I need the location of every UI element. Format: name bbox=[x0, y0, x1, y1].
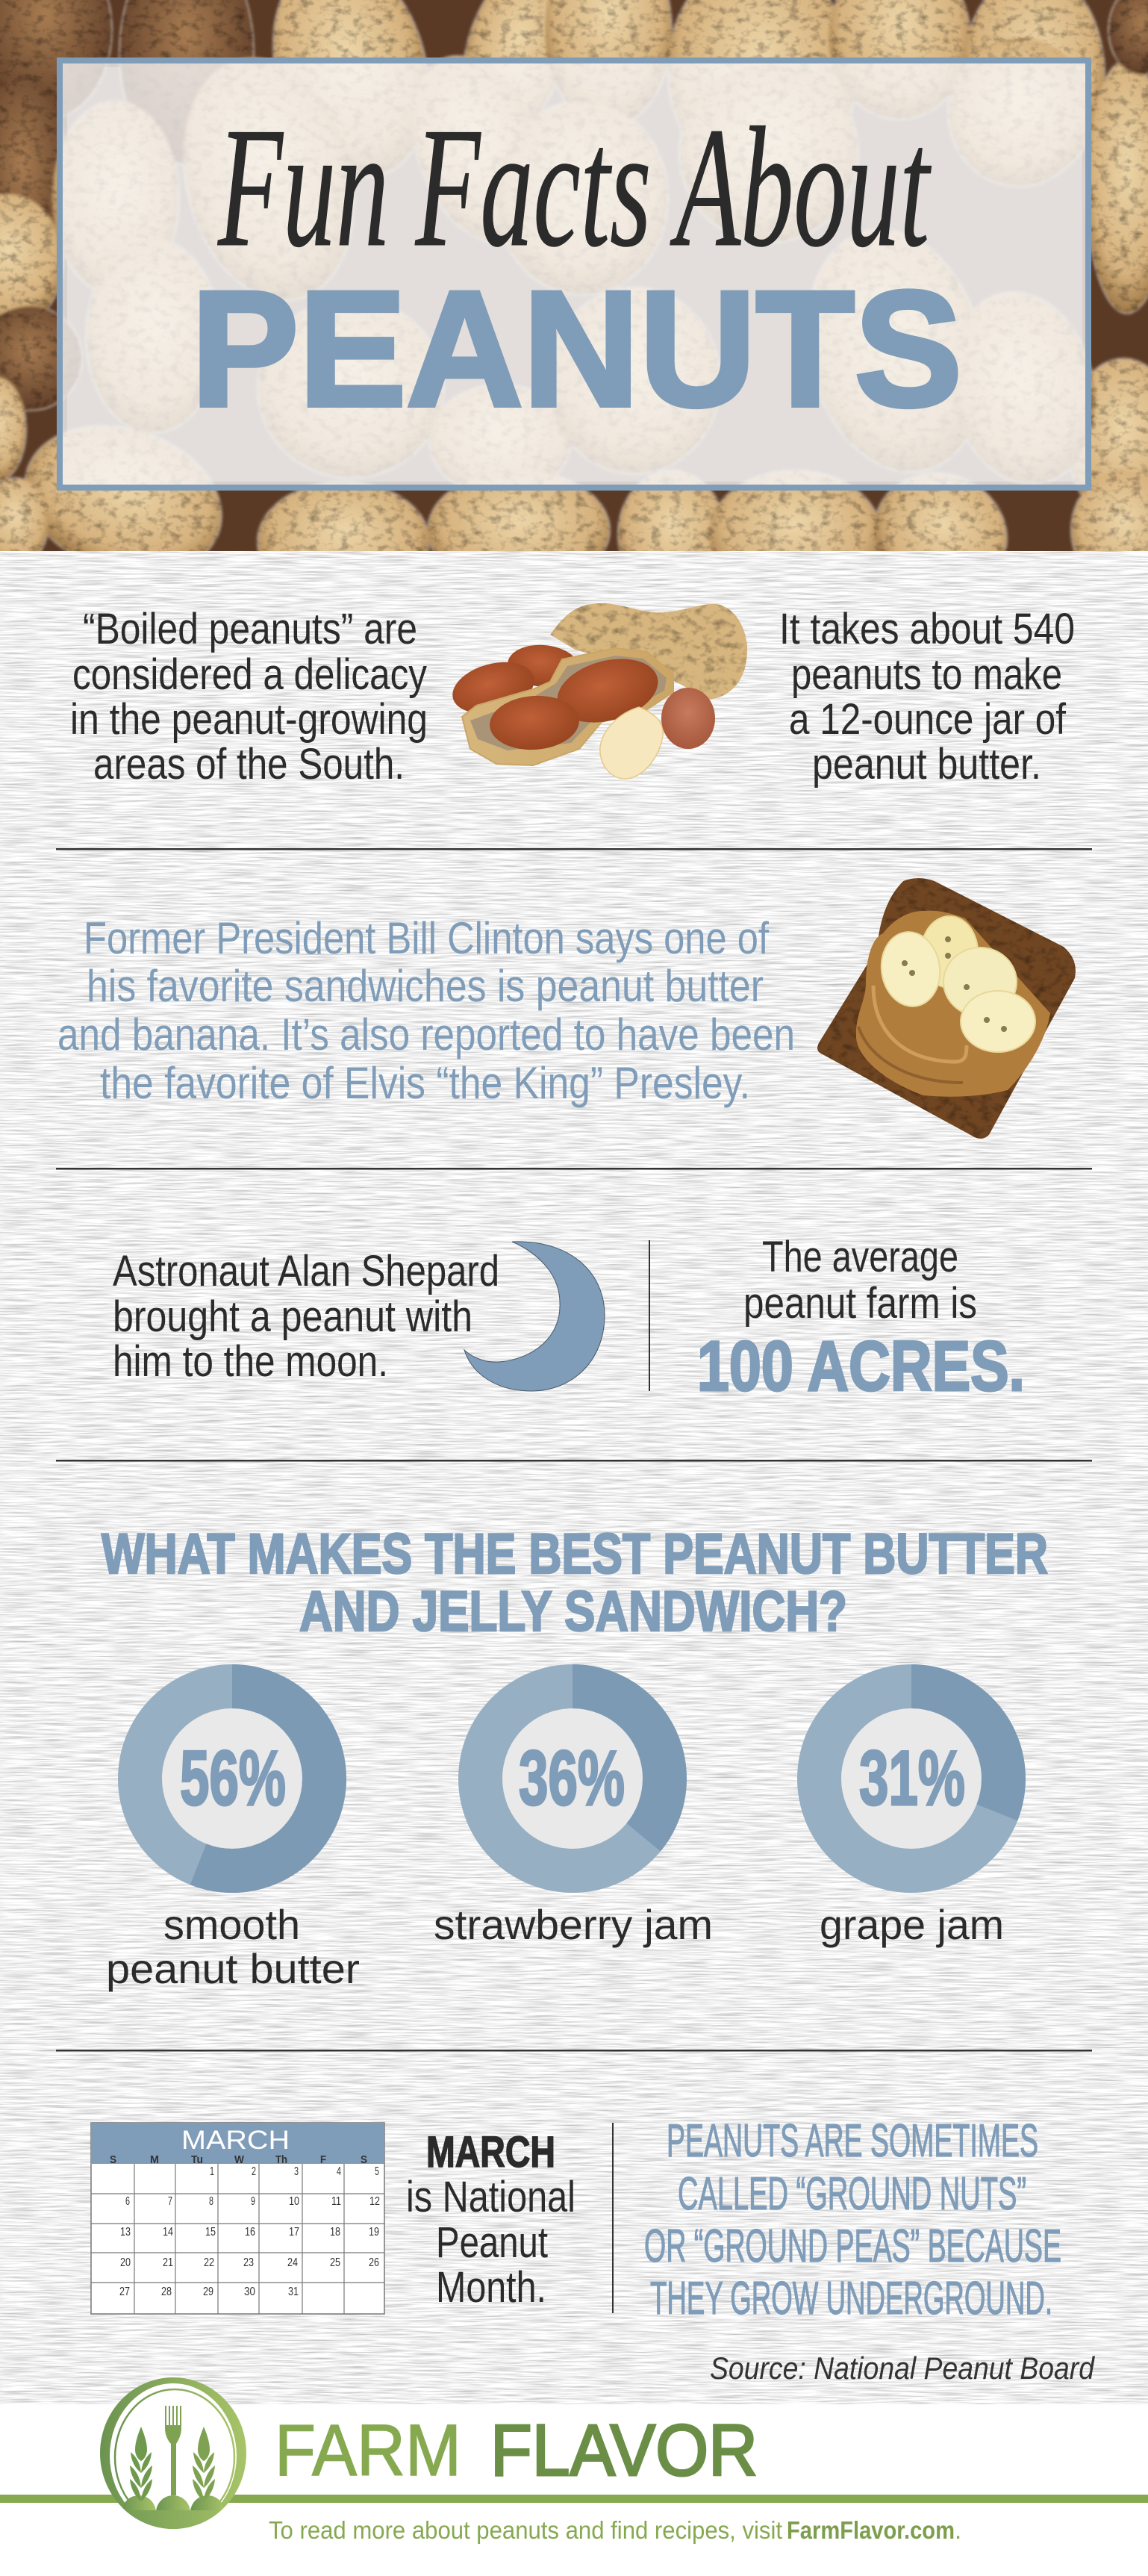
fact: 100 acres: The average bbox=[762, 1233, 958, 1281]
calendar dates: 15 bbox=[205, 2226, 216, 2239]
icon: crescent moon bbox=[464, 1242, 605, 1391]
fact: 540 peanuts bbox=[779, 605, 1075, 788]
fact: 540 peanuts: a 12-ounce jar of bbox=[789, 695, 1067, 744]
donut chart: 31% grape jam: grape jam bbox=[820, 1901, 1004, 1948]
calendar dates: 22 bbox=[204, 2256, 214, 2269]
emblem wheat left bbox=[130, 2427, 152, 2501]
hero peanut photo bbox=[0, 0, 1148, 551]
donut chart: 56% smooth peanut butter: peanut butter bbox=[106, 1945, 360, 1992]
calendar dates: 25 bbox=[330, 2256, 340, 2269]
fact: National Peanut Month: MARCH bbox=[426, 2128, 555, 2177]
calendar dates: 14 bbox=[163, 2226, 173, 2239]
calendar dates: 2 bbox=[252, 2165, 256, 2178]
calendar header: S bbox=[110, 2153, 116, 2166]
fact: Alan Shepard bbox=[113, 1247, 499, 1386]
fact: boiled peanuts: in the peanut-growing bbox=[70, 695, 428, 744]
donut chart: 56% smooth peanut butter bbox=[106, 1686, 360, 1992]
donut chart: 36% strawberry jam: 36% bbox=[519, 1735, 625, 1822]
calendar dates: 1 bbox=[210, 2165, 214, 2178]
calendar dates: 13 bbox=[120, 2226, 131, 2239]
fact: Clinton sandwich: the favorite of Elvis “the King” Presley. bbox=[100, 1058, 750, 1108]
logo wordmark bbox=[275, 2409, 758, 2491]
fact: National Peanut Month: Month. bbox=[436, 2263, 546, 2312]
calendar header: Tu bbox=[191, 2153, 203, 2166]
icon: shelled peanuts bbox=[447, 603, 747, 779]
logo wordmark: FLAVOR bbox=[490, 2409, 758, 2491]
calendar dates: 18 bbox=[330, 2226, 340, 2239]
fact: 100 acres: 100 ACRES. bbox=[697, 1327, 1025, 1406]
calendar header: W bbox=[234, 2153, 245, 2166]
calendar grid bbox=[91, 2164, 384, 2314]
calendar header: F bbox=[320, 2153, 326, 2166]
calendar dates: 31 bbox=[288, 2286, 299, 2298]
calendar dates: 9 bbox=[251, 2195, 255, 2208]
calendar dates: 16 bbox=[245, 2226, 255, 2239]
donut chart: 36% strawberry jam: strawberry jam bbox=[434, 1901, 713, 1948]
fact: 540 peanuts: peanuts to make bbox=[791, 650, 1062, 699]
calendar dates: 4 bbox=[337, 2165, 341, 2178]
calendar dates: 23 bbox=[243, 2256, 254, 2269]
calendar dates bbox=[119, 2165, 380, 2298]
calendar dates: 12 bbox=[369, 2195, 380, 2208]
fact: boiled peanuts: considered a delicacy bbox=[72, 650, 427, 699]
calendar dates: 20 bbox=[120, 2256, 131, 2269]
fact: National Peanut Month bbox=[406, 2128, 575, 2312]
calendar header: M bbox=[150, 2153, 159, 2166]
icon: peanut butter and banana toast bbox=[817, 878, 1076, 1139]
calendar dates: 29 bbox=[203, 2286, 213, 2298]
fact: Clinton sandwich bbox=[57, 913, 795, 1108]
footer call to action: To read more about peanuts and find recipes, visit bbox=[269, 2516, 782, 2544]
calendar dates: 24 bbox=[287, 2256, 298, 2269]
fact: National Peanut Month: Peanut bbox=[436, 2218, 548, 2267]
calendar dates: 26 bbox=[369, 2256, 379, 2269]
calendar dates: 5 bbox=[375, 2165, 379, 2178]
fact: 540 peanuts: It takes about 540 bbox=[779, 605, 1075, 653]
footer call to action: . bbox=[955, 2516, 961, 2544]
calendar dates: 7 bbox=[168, 2195, 172, 2208]
donut chart: 36% strawberry jam bbox=[434, 1686, 713, 1948]
footer call to action: FarmFlavor.com bbox=[787, 2516, 955, 2544]
calendar dates: 8 bbox=[209, 2195, 213, 2208]
fact: ground nuts bbox=[644, 2115, 1061, 2324]
fact: Clinton sandwich: and banana. It’s also reported to have been bbox=[57, 1009, 795, 1060]
calendar dates: 28 bbox=[161, 2286, 172, 2298]
logo wordmark: FARM bbox=[275, 2409, 461, 2491]
footer rule bbox=[0, 2495, 1148, 2503]
fact: 100 acres bbox=[697, 1233, 1025, 1406]
fact: boiled peanuts bbox=[70, 605, 428, 788]
emblem wheat right bbox=[193, 2427, 215, 2501]
calendar header: Th bbox=[275, 2153, 287, 2166]
calendar dates: 27 bbox=[119, 2286, 130, 2298]
calendar dates: 6 bbox=[125, 2195, 130, 2208]
heading: best peanut butter and jelly sandwich: AND JELLY SANDWICH? bbox=[299, 1580, 847, 1643]
calendar header bbox=[91, 2123, 384, 2166]
calendar dates: 30 bbox=[244, 2286, 255, 2298]
heading: best peanut butter and jelly sandwich bbox=[102, 1522, 1048, 1643]
fact: boiled peanuts: areas of the South. bbox=[93, 740, 405, 788]
fact: 540 peanuts: peanut butter. bbox=[812, 740, 1041, 788]
calendar: March bbox=[91, 2123, 384, 2314]
fact: Alan Shepard: him to the moon. bbox=[113, 1337, 388, 1386]
calendar dates: 19 bbox=[369, 2226, 379, 2239]
calendar dates: 11 bbox=[331, 2195, 341, 2208]
calendar dates: 17 bbox=[289, 2226, 299, 2239]
fact: boiled peanuts: “Boiled peanuts” are bbox=[83, 605, 417, 653]
fact: National Peanut Month: is National bbox=[406, 2173, 575, 2221]
fact: Alan Shepard: Astronaut Alan Shepard bbox=[113, 1247, 499, 1295]
donut chart: 56% smooth peanut butter: smooth bbox=[163, 1901, 300, 1948]
panel frame bbox=[60, 60, 1088, 488]
calendar dates: 10 bbox=[289, 2195, 299, 2208]
emblem base bbox=[122, 2495, 224, 2529]
fact: Alan Shepard: brought a peanut with bbox=[113, 1292, 472, 1341]
calendar dates: 21 bbox=[163, 2256, 173, 2269]
calendar header: MARCH bbox=[181, 2126, 290, 2155]
fact: Clinton sandwich: Former President Bill Clinton says one of bbox=[84, 913, 769, 963]
source credit: Source: National Peanut Board bbox=[710, 2351, 1095, 2386]
donut chart: 31% grape jam: 31% bbox=[859, 1735, 965, 1822]
title panel bbox=[60, 60, 1088, 488]
fact: 100 acres: peanut farm is bbox=[743, 1279, 977, 1328]
title main word: PEANUTS bbox=[191, 257, 962, 441]
donut chart: 31% grape jam bbox=[820, 1686, 1004, 1948]
logo: Farm Flavor emblem bbox=[97, 2377, 250, 2533]
calendar header: S bbox=[361, 2153, 367, 2166]
calendar dates: 3 bbox=[294, 2165, 299, 2178]
fact: Clinton sandwich: his favorite sandwiches is peanut butter bbox=[87, 961, 764, 1011]
emblem fork bbox=[165, 2406, 181, 2495]
donut chart: 56% smooth peanut butter: 56% bbox=[180, 1735, 286, 1822]
